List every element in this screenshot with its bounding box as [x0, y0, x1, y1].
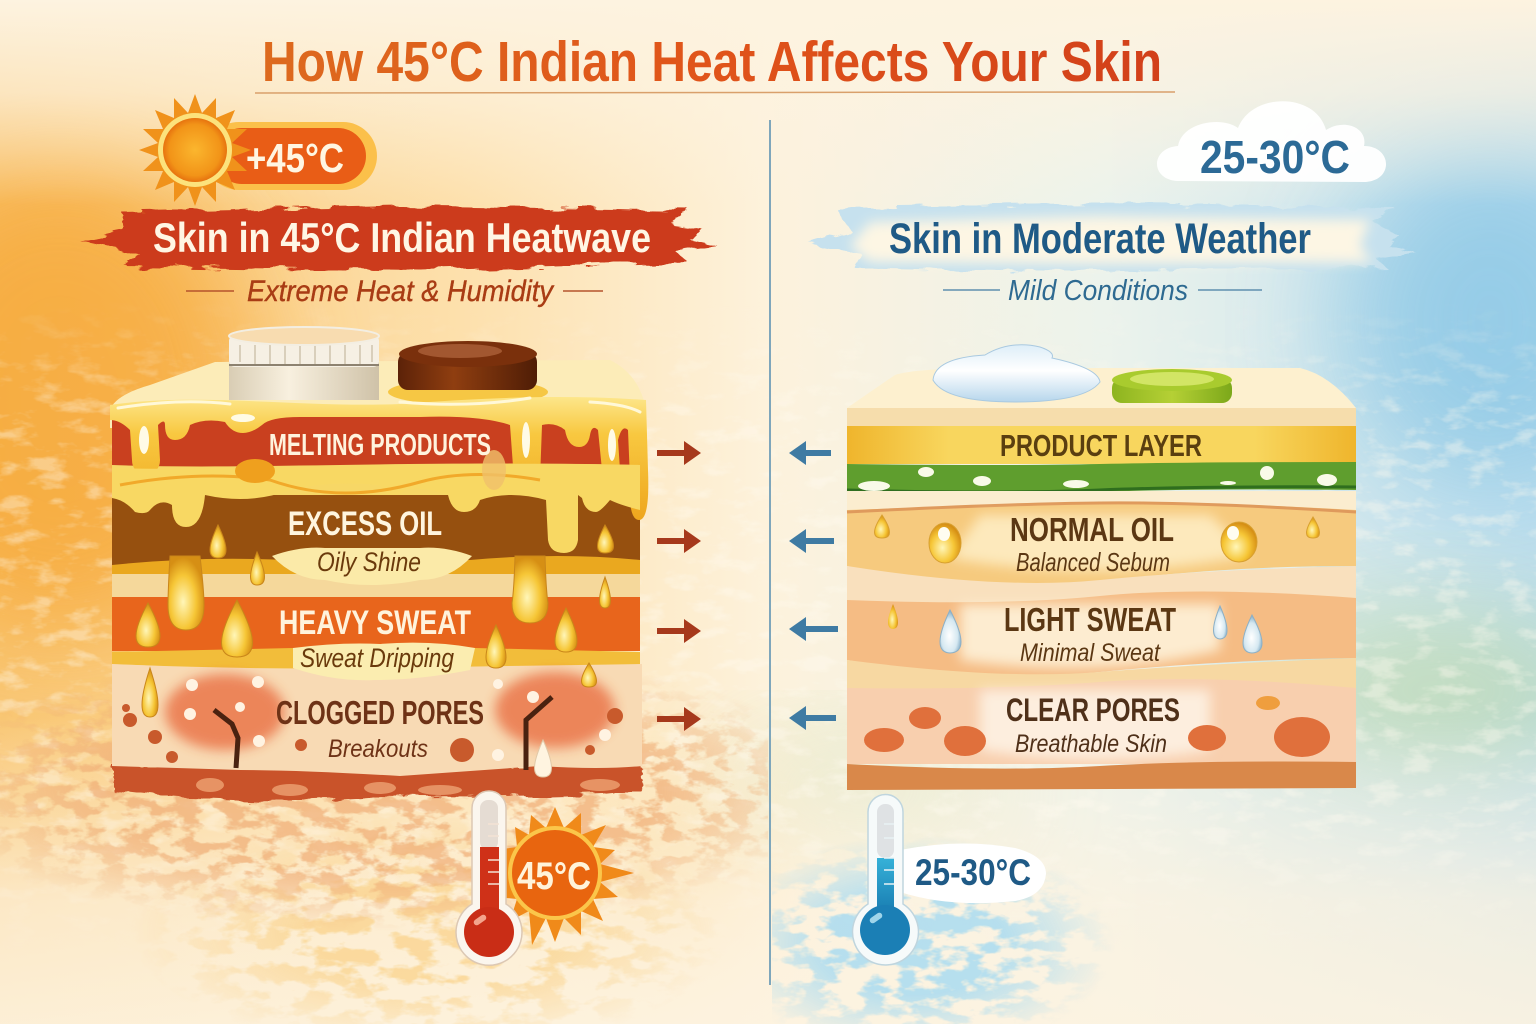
pill	[900, 843, 1046, 903]
strip: cream	[847, 491, 1356, 511]
lid: white jar	[229, 327, 379, 400]
panel: moderate skin block	[847, 345, 1356, 790]
lid: brown jar	[388, 341, 548, 405]
heading banner: moderate: Skin in Moderate Weather	[889, 215, 1311, 263]
subheading: mild conditions: Mild Conditions	[1008, 275, 1188, 307]
pore redness	[122, 672, 623, 770]
badge: cloud 25-30°C: 25-30°C	[1200, 131, 1350, 183]
label: excess oil: EXCESS OIL	[288, 505, 442, 543]
layer: normal oil: Balanced Sebum	[1016, 547, 1170, 577]
icon: sunburst: 45°C	[517, 855, 591, 898]
layer: normal oil	[847, 503, 1356, 587]
icon: sunburst	[495, 807, 634, 945]
long drips and droplets	[136, 525, 614, 717]
label: clogged pores: CLOGGED PORES	[276, 694, 484, 731]
heading banner: heatwave	[80, 206, 718, 270]
layer band: heavy sweat	[112, 597, 640, 651]
label: heavy sweat: HEAVY SWEAT	[279, 604, 471, 642]
thermometer: moderate	[853, 794, 1046, 965]
icon: white cream	[933, 345, 1100, 402]
layer: light sweat	[847, 591, 1356, 676]
banner: oily shine: Oily Shine	[317, 547, 421, 577]
icon: green gel lid	[1112, 369, 1232, 403]
layer: product	[847, 426, 1356, 494]
icon: oil drops	[874, 515, 1320, 563]
layer: band	[847, 658, 1356, 690]
icon: thermometer	[456, 791, 522, 965]
badge: +45°C with sun	[139, 94, 377, 206]
banner: oily shine	[272, 547, 472, 585]
icon: thermometer	[853, 794, 918, 965]
icon: sweat drops	[940, 606, 1262, 653]
icon: sun	[139, 94, 251, 206]
layer: clear pores: CLEAR PORES	[1006, 692, 1180, 728]
base shadow	[112, 765, 642, 801]
arrows: moderate side	[789, 441, 838, 730]
label: melting products: MELTING PRODUCTS	[269, 427, 491, 462]
layer: light sweat: LIGHT SWEAT	[1004, 601, 1176, 638]
layer: light sweat: Minimal Sweat	[1020, 639, 1161, 667]
heading banner: heatwave: Skin in 45°C Indian Heatwave	[153, 214, 651, 261]
layer: cream band	[847, 566, 1356, 606]
layer: product: PRODUCT LAYER	[1000, 428, 1202, 463]
yellow melt lower edge with drips	[112, 464, 640, 553]
layer band: excess oil	[112, 495, 640, 575]
centre divider line	[769, 120, 771, 985]
panel: hot skin block	[110, 327, 648, 801]
subheading: extreme heat: Extreme Heat & Humidity	[247, 275, 555, 308]
melted highlights	[118, 398, 640, 412]
thermometer: hot	[456, 791, 634, 965]
heading banner: moderate	[810, 204, 1415, 272]
layer band: yellow strip	[112, 648, 640, 672]
block top	[847, 368, 1356, 408]
layer band: yellow melt	[112, 464, 640, 510]
block top	[110, 360, 646, 428]
layer: normal oil: NORMAL OIL	[1010, 511, 1174, 548]
badge: cloud 25-30°C	[1157, 101, 1386, 183]
layer band: cream	[112, 574, 640, 600]
icon: small oil drop	[888, 604, 898, 629]
badge: +45°C with sun: +45°C	[246, 135, 344, 181]
layer: clear pores: Breathable Skin	[1015, 730, 1167, 758]
melted product top with drips	[110, 397, 648, 520]
title: How 45°C Indian Heat Affects Your Skin	[262, 30, 1162, 94]
arrows: hot side	[657, 441, 701, 731]
banner: sweat dripping: Sweat Dripping	[300, 643, 454, 673]
label: breakouts: Breakouts	[328, 735, 428, 763]
label: 25-30°C: 25-30°C	[915, 852, 1031, 893]
layer band: clogged pores	[112, 664, 642, 776]
base	[847, 762, 1356, 790]
layer band: melting products	[112, 415, 638, 469]
layer: clear pores	[847, 679, 1356, 764]
